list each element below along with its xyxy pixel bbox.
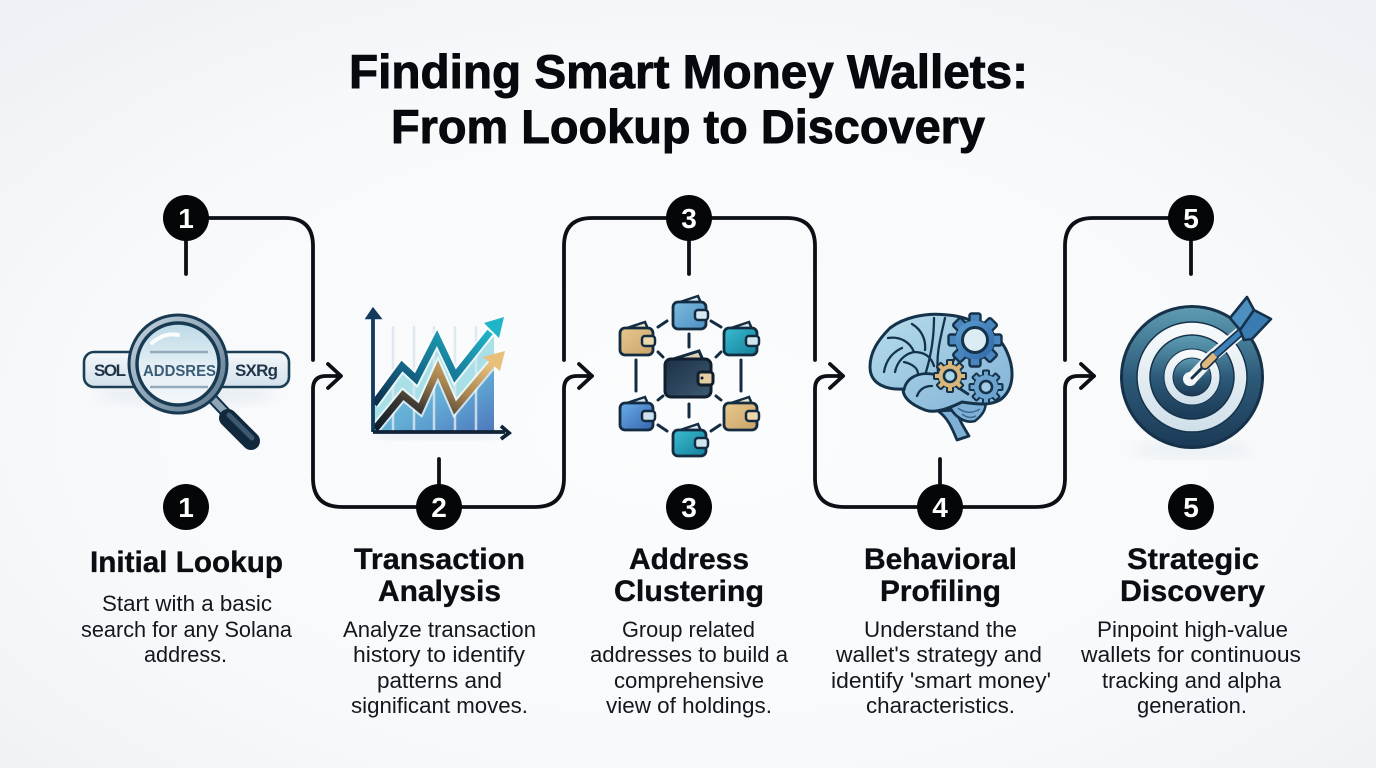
- icon: magnifier over address bar: ADDSRES: [143, 363, 216, 380]
- title: Finding Smart Money Wallets:: [349, 45, 1028, 98]
- badge 4: [917, 484, 963, 530]
- description: history to identify: [353, 642, 525, 667]
- description: identify 'smart money': [831, 668, 1051, 693]
- wallet lower left: [620, 397, 655, 430]
- badge 2: 2: [431, 492, 447, 523]
- heading: Analysis: [378, 575, 501, 608]
- heading: Behavioral: [864, 543, 1017, 576]
- wallet lower right: [724, 397, 759, 430]
- small gear: [970, 370, 1002, 404]
- description: address.: [144, 642, 227, 667]
- badge 1 top: 1: [178, 203, 194, 234]
- heading: [1120, 543, 1265, 608]
- heading: Transaction: [354, 543, 525, 576]
- large gear: [948, 314, 1002, 366]
- heading: Initial Lookup: [90, 546, 283, 579]
- heading: [864, 543, 1017, 608]
- title: From Lookup to Discovery: [391, 100, 985, 153]
- badge 3 top: 3: [681, 203, 697, 234]
- heading: Address: [629, 543, 749, 576]
- badge 1 top: [163, 195, 209, 241]
- description: [1080, 617, 1301, 718]
- step 2: transaction analysis: [343, 309, 536, 718]
- step 3: address clustering: [590, 195, 789, 718]
- description: comprehensive: [614, 668, 764, 693]
- description: characteristics.: [866, 693, 1015, 718]
- description: [343, 617, 536, 718]
- description: Pinpoint high-value: [1097, 617, 1288, 642]
- icon: rising line chart: [367, 309, 509, 439]
- description: patterns and: [377, 668, 502, 693]
- badge 5 top: [1168, 195, 1214, 241]
- wallet top: [673, 296, 708, 329]
- badge 3 top: [666, 195, 712, 241]
- description: [831, 617, 1051, 718]
- description: significant moves.: [351, 693, 528, 718]
- heading: [354, 543, 525, 608]
- heading: Clustering: [614, 575, 764, 608]
- badge 1 bottom: [163, 484, 209, 530]
- badge 5 bottom: 5: [1183, 492, 1199, 523]
- heading: [614, 543, 764, 608]
- description: [590, 617, 789, 718]
- wallet upper right: [724, 322, 759, 355]
- icon: brain with gears: [870, 314, 1012, 440]
- connector paths linking the five steps: [186, 218, 1191, 507]
- badge 3 bottom: 3: [681, 492, 697, 523]
- step 1: initial lookup: [81, 195, 293, 667]
- wallet center: [665, 351, 713, 397]
- description: Analyze transaction: [343, 617, 536, 642]
- badge 3 bottom: [666, 484, 712, 530]
- description: [81, 591, 293, 667]
- icon: target with dart: [1122, 297, 1271, 456]
- badge 1 bottom: 1: [178, 492, 194, 523]
- description: generation.: [1137, 693, 1247, 718]
- heading: Profiling: [880, 575, 1001, 608]
- heading: Strategic: [1127, 543, 1259, 576]
- description: wallet's strategy and: [835, 642, 1042, 667]
- tan gear: [934, 360, 966, 392]
- description: Group related: [622, 617, 755, 642]
- badge 2: [416, 484, 462, 530]
- description: Start with a basic: [102, 591, 272, 616]
- wallet bottom: [673, 424, 708, 456]
- heading: Discovery: [1120, 575, 1265, 608]
- icon: magnifier over address bar: [84, 315, 289, 441]
- icon: wallet cluster network: [620, 296, 759, 456]
- description: wallets for continuous: [1080, 642, 1301, 667]
- description: tracking and alpha: [1102, 668, 1282, 693]
- title: [349, 45, 1028, 153]
- step 4: behavioral profiling: [831, 314, 1051, 718]
- step 5: strategic discovery: [1080, 195, 1301, 718]
- badge 5 top: 5: [1183, 203, 1199, 234]
- description: Understand the: [864, 617, 1017, 642]
- badge 5 bottom: [1168, 484, 1214, 530]
- description: view of holdings.: [606, 693, 772, 718]
- badge 4: 4: [932, 492, 948, 523]
- icon: magnifier over address bar: SXRg: [235, 361, 278, 380]
- description: addresses to build a: [590, 642, 789, 667]
- wallet upper left: [620, 322, 655, 355]
- icon: magnifier over address bar: SOL: [94, 361, 126, 380]
- description: search for any Solana: [81, 617, 293, 642]
